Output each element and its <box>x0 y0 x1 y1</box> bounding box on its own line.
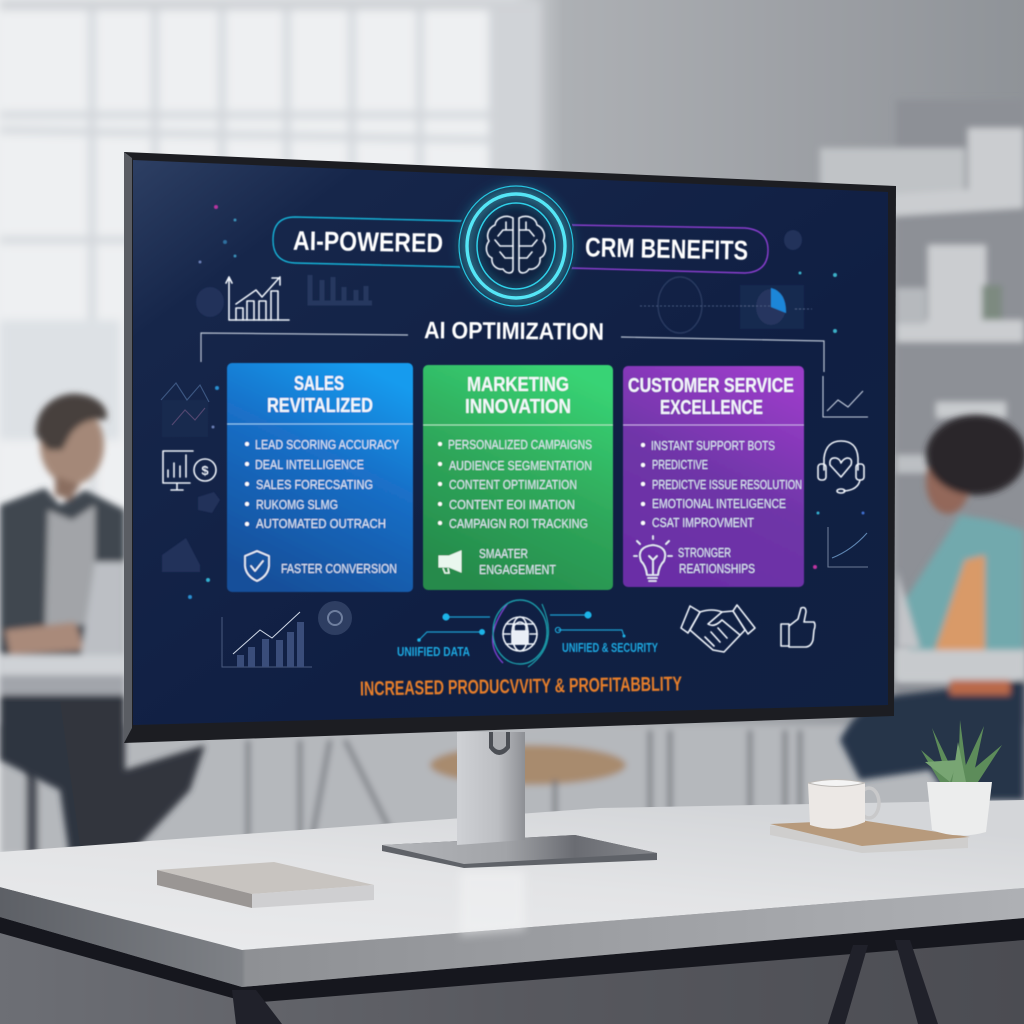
icon: glowing brain in rings <box>456 186 576 306</box>
blurred background furniture <box>0 648 1024 855</box>
heading: EXCELLENCE <box>660 397 763 419</box>
bullet list: PREDICTIVE <box>652 457 708 472</box>
monitor <box>124 152 896 743</box>
bullet list: RUKOMG SLMG <box>256 497 338 512</box>
benefit text <box>678 545 755 576</box>
benefit text: SMAATER <box>479 546 528 561</box>
unified data connector <box>397 613 490 659</box>
desk <box>0 800 1024 1024</box>
heading: INNOVATION <box>465 396 571 418</box>
icon: faint line chart <box>161 383 209 425</box>
card: Marketing Innovation <box>423 365 613 590</box>
decorative faint charts and dots <box>162 205 864 599</box>
bullet list: LEAD SCORING ACCURACY <box>255 437 399 452</box>
benefit text <box>479 546 556 577</box>
heading: MARKETING <box>467 374 569 396</box>
heading <box>465 374 571 418</box>
bullet list: CSAT IMPROVMENT <box>652 515 754 530</box>
unified security connector <box>550 611 658 655</box>
header pill: CRM BENEFITS: CRM BENEFITS <box>585 232 748 266</box>
icon: headset with heart <box>818 441 864 493</box>
icon: small line chart <box>823 376 868 417</box>
person: woman with laptop <box>840 415 1024 800</box>
unified data connector: UNIIFIED DATA <box>397 645 470 659</box>
bezel <box>124 152 896 743</box>
icon: secure globe <box>493 600 548 667</box>
heading: CUSTOMER SERVICE <box>628 375 794 397</box>
desk frame and legs <box>0 917 1024 1024</box>
bullet list: DEAL INTELLIGENCE <box>255 457 364 472</box>
icon: monitor with dollar coin: $ <box>201 463 209 478</box>
heading <box>628 375 794 419</box>
bullet list <box>438 437 592 531</box>
bullet list: CONTENT EOI IMATION <box>449 497 575 512</box>
icon: megaphone <box>439 551 461 573</box>
potted plant <box>921 720 1002 836</box>
bullet list: PREDICTVE ISSUE RESOLUTION <box>652 477 802 492</box>
bullet list: CONTENT OPTIMIZATION <box>449 477 577 492</box>
window with panes <box>0 0 540 720</box>
sub-heading: AI Optimization: AI OPTIMIZATION <box>424 317 604 346</box>
benefit text: REATIONSHIPS <box>679 561 755 576</box>
icon: growth chart <box>226 277 289 320</box>
coffee mug <box>808 780 879 829</box>
icon: light bulb <box>634 536 672 581</box>
chart: bar trend bottom left <box>222 612 312 667</box>
unified security connector: UNIFIED & SECURITY <box>562 641 658 655</box>
bullet list: EMOTIONAL INTELIGENCE <box>652 496 786 511</box>
heading: SALES <box>294 373 344 395</box>
bullet list: INSTANT SUPPORT BOTS <box>651 438 775 453</box>
icon: shield check <box>245 551 269 581</box>
heading: REVITALIZED <box>267 395 373 417</box>
icon: monitor with dollar coin <box>163 451 216 490</box>
icon: thumbs up <box>781 608 815 647</box>
header pill: AI-POWERED <box>273 217 462 267</box>
bullet list: SALES FORECSATING <box>256 477 373 492</box>
icon: curve chart <box>828 527 868 567</box>
monitor stand <box>382 732 657 868</box>
bullet list: AUTOMATED OUTRACH <box>256 516 386 531</box>
desk edge <box>0 887 1024 987</box>
person: man with laptop <box>0 394 205 860</box>
benefit text: STRONGER <box>678 545 731 560</box>
brain outline <box>486 216 546 273</box>
screen <box>133 160 888 725</box>
floor <box>0 900 1024 1024</box>
bullet list: AUDIENCE SEGMENTATION <box>449 458 592 473</box>
desk top surface <box>0 800 1024 950</box>
shelves on the right wall <box>820 100 1024 820</box>
closed book on desk <box>157 862 374 908</box>
header pill: CRM BENEFITS <box>570 225 768 273</box>
bullet list <box>641 438 802 530</box>
notebook with mug <box>770 780 970 853</box>
heading <box>267 373 373 417</box>
bullet list <box>245 437 399 531</box>
card: Customer Service Excellence <box>623 366 804 587</box>
reflection <box>460 870 525 936</box>
bullet list: PERSONALIZED CAMPAIGNS <box>448 437 592 452</box>
header pill: AI-POWERED: AI-POWERED <box>293 226 443 258</box>
footer banner: INCREASED PRODUCVVITY & PROFITABBLITY <box>360 673 683 701</box>
bullet list: CAMPAIGN ROI TRACKING <box>449 516 588 531</box>
benefit text: FASTER CONVERSION <box>281 561 397 576</box>
icon: faint data circle <box>318 601 352 635</box>
sub-heading: AI Optimization <box>201 317 824 372</box>
benefit text: ENGAGEMENT <box>479 562 556 577</box>
card: Sales Revitalized <box>227 363 413 592</box>
icon: handshake <box>681 605 755 652</box>
